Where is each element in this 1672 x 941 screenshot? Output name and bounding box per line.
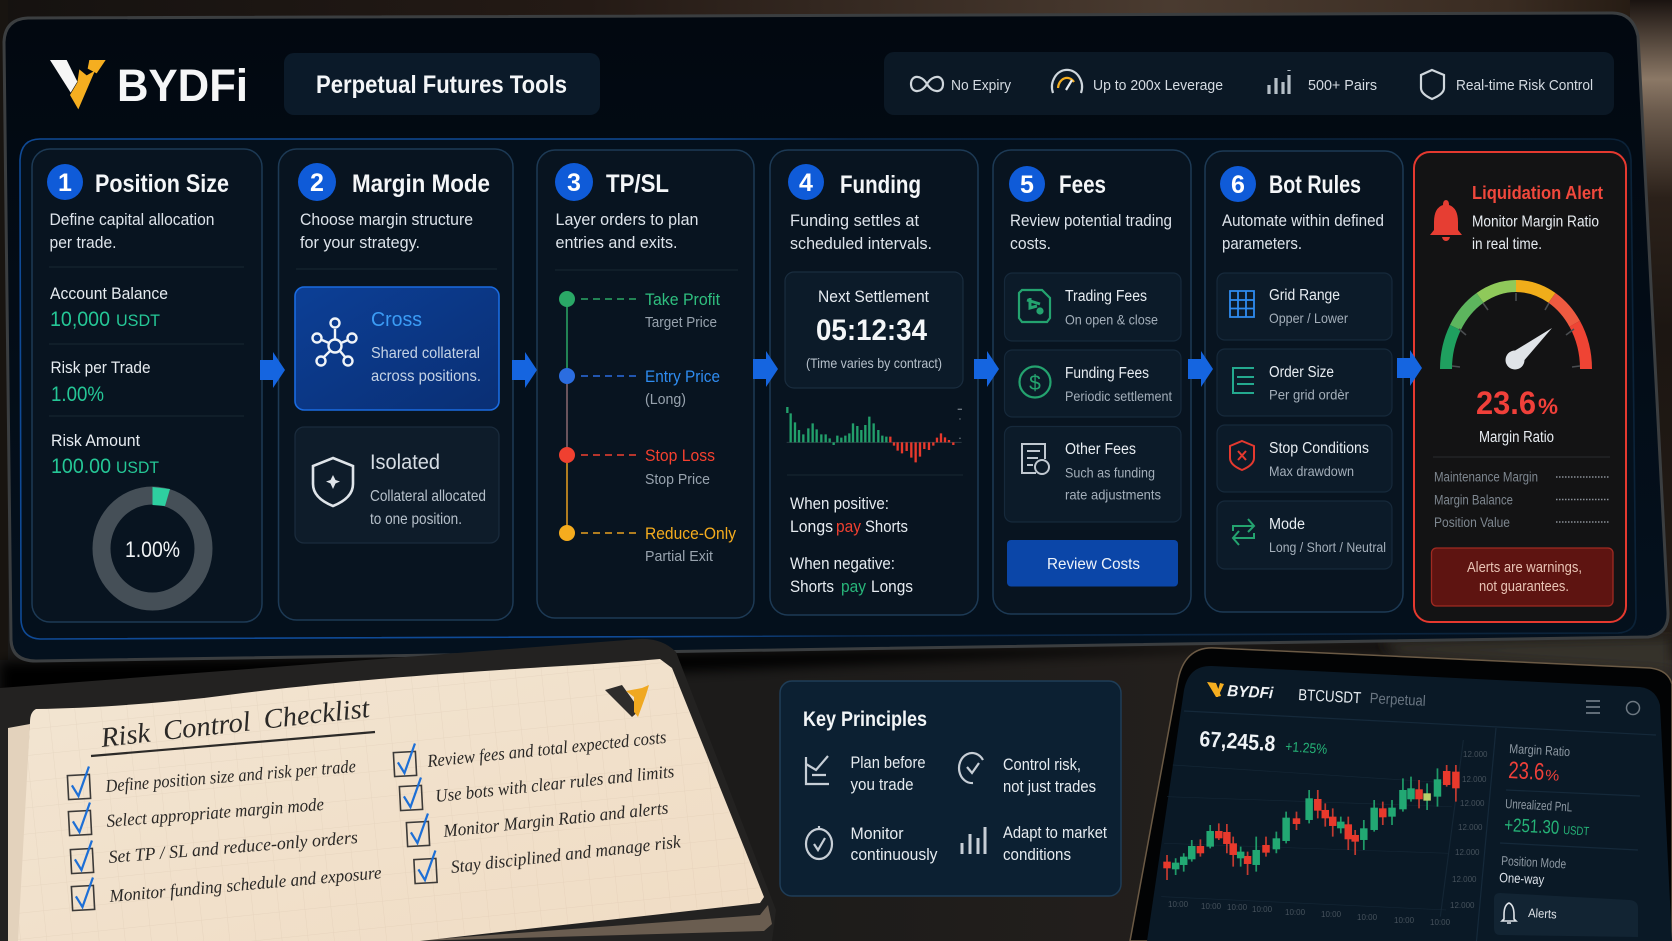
- panel 6: bot rules: [1205, 151, 1403, 612]
- panel: key principles: Plan before: [850, 754, 926, 772]
- panel: key principles: [780, 681, 1121, 896]
- title pill: [284, 53, 600, 115]
- option: cross: Cross: [371, 309, 422, 331]
- row: funding fees: Funding Fees: [1065, 365, 1149, 382]
- row: order size: [1217, 349, 1392, 416]
- panel 1: position size: USDT: [116, 311, 160, 330]
- title pill: Perpetual Futures Tools: [316, 71, 567, 99]
- icon: stop shield: [1230, 441, 1254, 470]
- icon: dollar coin: [1020, 366, 1050, 398]
- funding direction notes: Longs: [871, 578, 913, 596]
- funding direction notes: Longs: [790, 518, 833, 536]
- checklist left column: Define position size and risk per trade: [104, 756, 357, 796]
- panel 5: fees: [993, 150, 1191, 614]
- arrow 6: [1397, 350, 1422, 386]
- arrow 5: [1188, 351, 1213, 387]
- panel 2: margin mode: Margin Mode: [352, 170, 490, 198]
- tablet header: [1207, 682, 1640, 714]
- tablet price: 67,245.8: [1199, 726, 1276, 756]
- icon: grid: [1230, 291, 1254, 317]
- logo: BYDFi: BYDFi: [117, 60, 248, 111]
- checklist note card: [18, 659, 772, 941]
- row: funding fees: [1004, 350, 1181, 417]
- panel 1: position size: 100.00: [51, 455, 111, 478]
- funding direction notes: pay: [836, 518, 862, 536]
- icon: plan checklist: [806, 756, 829, 784]
- candlestick chart: 10:00: [1252, 905, 1273, 914]
- countdown box: 05:12:34: [816, 314, 927, 347]
- funding direction notes: When positive:: [790, 495, 889, 513]
- candlestick chart: 12.000: [1462, 775, 1487, 784]
- row: mode: Long / Short / Neutral: [1269, 539, 1386, 555]
- panel: key principles: continuously: [850, 846, 938, 864]
- panel 2: margin mode: Choose margin structure: [300, 210, 473, 229]
- feature bar: No Expiry: [951, 77, 1011, 94]
- order ladder: Partial Exit: [645, 548, 714, 565]
- panel: liquidation alert: in real time.: [1472, 236, 1542, 253]
- checklist right column: Use bots with clear rules and limits: [434, 761, 675, 806]
- option: cross: [295, 287, 499, 410]
- row: order size: Per grid ordèr: [1269, 386, 1349, 402]
- panel 1: position size: Risk per Trade: [50, 359, 150, 377]
- margin details: [1434, 470, 1609, 530]
- tablet header: BTCUSDT: [1298, 687, 1362, 707]
- tablet: [1130, 648, 1672, 941]
- feature bar: Up to 200x Leverage: [1093, 77, 1223, 94]
- panel: key principles: not just trades: [1003, 778, 1096, 796]
- option: cross: Shared collateral: [371, 345, 480, 362]
- row: funding fees: Periodic settlement: [1065, 388, 1172, 404]
- panel 1: position size: 1.00%: [51, 383, 104, 406]
- donut chart: 1.00%: [125, 537, 180, 562]
- tablet side panel: +251.30: [1504, 815, 1560, 839]
- countdown box: Next Settlement: [818, 288, 929, 306]
- panel 1: position size: per trade.: [50, 233, 116, 252]
- panel 4: funding: Funding: [840, 171, 921, 199]
- funding direction notes: When negative:: [790, 555, 895, 573]
- tablet header: Perpetual: [1369, 690, 1426, 710]
- panel 5: fees: Review potential trading: [1010, 211, 1172, 230]
- row: stop conditions: Max drawdown: [1269, 463, 1354, 479]
- panel: liquidation alert: Monitor Margin Ratio: [1472, 214, 1599, 230]
- panel 3: TP/SL: Layer orders to plan: [556, 210, 698, 229]
- monitor screen: [4, 13, 1668, 661]
- arrow 1: [260, 352, 285, 388]
- logo: BYDFi: [50, 60, 248, 111]
- panel: liquidation alert: Margin Ratio: [1479, 429, 1554, 446]
- paper backing and shadow: [0, 639, 776, 941]
- panel 4: funding: scheduled intervals.: [790, 234, 932, 253]
- panel: liquidation alert: 23.6: [1476, 385, 1536, 421]
- warning box: not guarantees.: [1479, 578, 1569, 595]
- checklist right column: Stay disciplined and manage risk: [450, 831, 682, 877]
- panel: key principles: Control risk,: [1003, 756, 1081, 774]
- checklist left column: Monitor funding schedule and exposure: [108, 862, 382, 906]
- order ladder: Take Profit: [645, 290, 720, 309]
- funding direction notes: Shorts: [865, 518, 908, 536]
- tablet alerts row: [1494, 893, 1638, 937]
- candlestick chart: 12.000: [1452, 875, 1477, 884]
- panel 1: position size: Risk Amount: [51, 432, 140, 450]
- panel 1: position size: 10,000: [50, 308, 110, 331]
- gauge: margin ratio: [1446, 286, 1586, 370]
- tablet alerts row: Alerts: [1528, 906, 1557, 921]
- candlestick chart: 12.000: [1450, 901, 1475, 910]
- tablet price: [1199, 726, 1328, 757]
- icon: order list: [1233, 368, 1254, 393]
- margin details: Maintenance Margin: [1434, 470, 1538, 484]
- checklist left column: [67, 756, 382, 911]
- panel 5: fees: 5: [1020, 171, 1034, 199]
- checklist right column: [393, 727, 682, 884]
- order ladder: Reduce-Only: [645, 524, 736, 543]
- candlestick chart: [1161, 740, 1488, 927]
- icon: infinity: [911, 77, 943, 91]
- panel 6: bot rules: 6: [1231, 171, 1245, 199]
- checklist right column: Monitor Margin Ratio and alerts: [441, 797, 669, 841]
- panel 3: TP/SL: TP/SL: [606, 170, 669, 198]
- panel: liquidation alert: Liquidation Alert: [1472, 183, 1603, 203]
- candlestick chart: 12.000: [1460, 799, 1485, 808]
- order ladder: Entry Price: [645, 367, 720, 386]
- icon: pairs bars: [1269, 70, 1289, 94]
- icon: shield: [1421, 70, 1444, 99]
- tablet header: BYDFi: [1227, 683, 1274, 702]
- icon: dollar coin: $: [1029, 372, 1041, 395]
- panel 5: fees: Fees: [1059, 171, 1106, 199]
- panel 3: TP/SL: entries and exits.: [556, 233, 678, 252]
- warning box: [1432, 548, 1613, 606]
- candlestick chart: 10:00: [1285, 908, 1306, 917]
- panel: key principles: you trade: [850, 776, 914, 794]
- order ladder: [559, 290, 736, 565]
- icon: swap arrows: [1233, 519, 1254, 545]
- panel: liquidation alert: [1414, 152, 1626, 622]
- row: other fees: Such as funding: [1065, 464, 1155, 480]
- order ladder: (Long): [645, 391, 686, 408]
- logo on paper: [605, 685, 649, 717]
- panel: liquidation alert: %: [1538, 394, 1558, 419]
- arrow 2: [512, 352, 537, 388]
- order ladder: Stop Price: [645, 471, 710, 488]
- button: review costs: Review Costs: [1047, 556, 1140, 573]
- panel 1: position size: Account Balance: [50, 285, 168, 303]
- feature bar: [884, 52, 1614, 115]
- panel 1: position size: [32, 149, 262, 622]
- panel 1: position size: USDT: [116, 458, 159, 477]
- panel: key principles: conditions: [1003, 846, 1071, 864]
- feature bar: Real-time Risk Control: [1456, 77, 1593, 94]
- warning box: Alerts are warnings,: [1467, 559, 1582, 576]
- option: isolated: to one position.: [370, 511, 462, 528]
- candlestick chart: 10:00: [1430, 918, 1451, 927]
- option: cross: across positions.: [371, 368, 481, 385]
- tablet side panel: 23.6: [1508, 757, 1545, 786]
- row: other fees: Other Fees: [1065, 441, 1136, 458]
- panel 1: position size: Position Size: [95, 170, 229, 198]
- panel 1: position size: 1: [58, 169, 72, 197]
- panel 6: bot rules: Automate within defined: [1222, 211, 1384, 230]
- tablet side panel: [1499, 741, 1640, 887]
- funding direction notes: Shorts: [790, 578, 834, 596]
- candlestick chart: 12.000: [1463, 750, 1488, 759]
- funding rate bar chart: [787, 407, 962, 462]
- panel 5: fees: costs.: [1010, 234, 1051, 253]
- icon: control risk: [959, 753, 983, 783]
- panel 4: funding: 4: [799, 169, 813, 197]
- row: mode: [1217, 501, 1392, 569]
- tablet side panel: %: [1545, 767, 1560, 785]
- checklist left column: Set TP / SL and reduce-only orders: [108, 827, 359, 867]
- checklist right column: Review fees and total expected costs: [425, 727, 667, 771]
- icon: network: [312, 318, 356, 366]
- row: grid range: Grid Range: [1269, 287, 1340, 304]
- order ladder: Stop Loss: [645, 446, 715, 465]
- tablet side panel: USDT: [1563, 823, 1590, 838]
- candlestick chart: 10:00: [1321, 910, 1342, 919]
- row: mode: Mode: [1269, 516, 1305, 533]
- margin details: Position Value: [1434, 515, 1510, 530]
- margin details: Margin Balance: [1434, 492, 1513, 508]
- row: trading fees: On open & close: [1065, 312, 1158, 328]
- panel: key principles: Key Principles: [803, 708, 927, 731]
- icon: bell: [1430, 200, 1462, 241]
- candlestick chart: 10:00: [1394, 916, 1415, 925]
- option: isolated: [295, 427, 499, 543]
- funding direction notes: pay: [841, 578, 867, 596]
- candlestick chart: 10:00: [1168, 900, 1189, 909]
- arrow 3: [753, 351, 778, 387]
- row: other fees: rate adjustments: [1065, 486, 1161, 502]
- panel 3: TP/SL: 3: [567, 169, 581, 197]
- icon: shield: [313, 458, 353, 506]
- panel 6: bot rules: parameters.: [1222, 234, 1302, 253]
- arrow 4: [974, 351, 999, 387]
- icon: market bars: [962, 827, 985, 854]
- row: trading fees: Trading Fees: [1065, 288, 1147, 305]
- checklist title: Risk Control Checklist: [98, 693, 372, 754]
- panel 4: funding: Funding settles at: [790, 211, 919, 230]
- feature bar: 500+ Pairs: [1308, 77, 1377, 94]
- checklist left column: Select appropriate margin mode: [106, 794, 325, 831]
- panel 1: position size: Define capital allocation: [50, 210, 214, 229]
- candlestick chart: 12.000: [1458, 823, 1483, 832]
- button: review costs: [1007, 540, 1178, 586]
- order ladder: Target Price: [645, 314, 717, 331]
- row: order size: Order Size: [1269, 364, 1334, 381]
- row: grid range: [1217, 273, 1392, 340]
- panel 2: margin mode: 2: [310, 169, 324, 197]
- row: trading fees: [1004, 273, 1181, 341]
- candlestick chart: 10:00: [1357, 913, 1378, 922]
- option: isolated: Collateral allocated: [370, 488, 486, 505]
- panel: key principles: Adapt to market: [1003, 824, 1107, 842]
- panel: key principles: Monitor: [850, 825, 904, 843]
- icon: document with clock: [1022, 444, 1049, 474]
- row: other fees: [1004, 426, 1181, 522]
- countdown box: [785, 272, 963, 388]
- panel 4: funding: [770, 150, 978, 615]
- panel 2: margin mode: [278, 149, 513, 620]
- tablet side panel: Margin Ratio: [1509, 741, 1571, 759]
- tablet side panel: One-way: [1499, 870, 1545, 887]
- candlestick chart: 10:00: [1227, 903, 1248, 912]
- panel 3: TP/SL: [537, 150, 754, 618]
- panel 6: bot rules: Bot Rules: [1269, 171, 1361, 199]
- funding direction notes: [790, 495, 913, 596]
- countdown box: (Time varies by contract): [806, 355, 942, 371]
- panel 2: margin mode: for your strategy.: [300, 233, 420, 252]
- icon: leverage gauge: [1052, 70, 1082, 93]
- row: stop conditions: Stop Conditions: [1269, 440, 1369, 457]
- option: isolated: Isolated: [370, 451, 440, 474]
- row: stop conditions: [1217, 425, 1392, 492]
- donut chart: [102, 487, 204, 602]
- candlestick chart: 10:00: [1201, 902, 1222, 911]
- icon: fee document: [1019, 290, 1050, 322]
- tablet side panel: Position Mode: [1501, 853, 1567, 871]
- tablet price: +1.25%: [1285, 738, 1328, 757]
- candlestick chart: 12.000: [1455, 848, 1480, 857]
- icon: stopwatch: [806, 826, 832, 859]
- row: grid range: Opper / Lower: [1269, 310, 1348, 326]
- tablet side panel: Unrealized PnL: [1505, 796, 1573, 815]
